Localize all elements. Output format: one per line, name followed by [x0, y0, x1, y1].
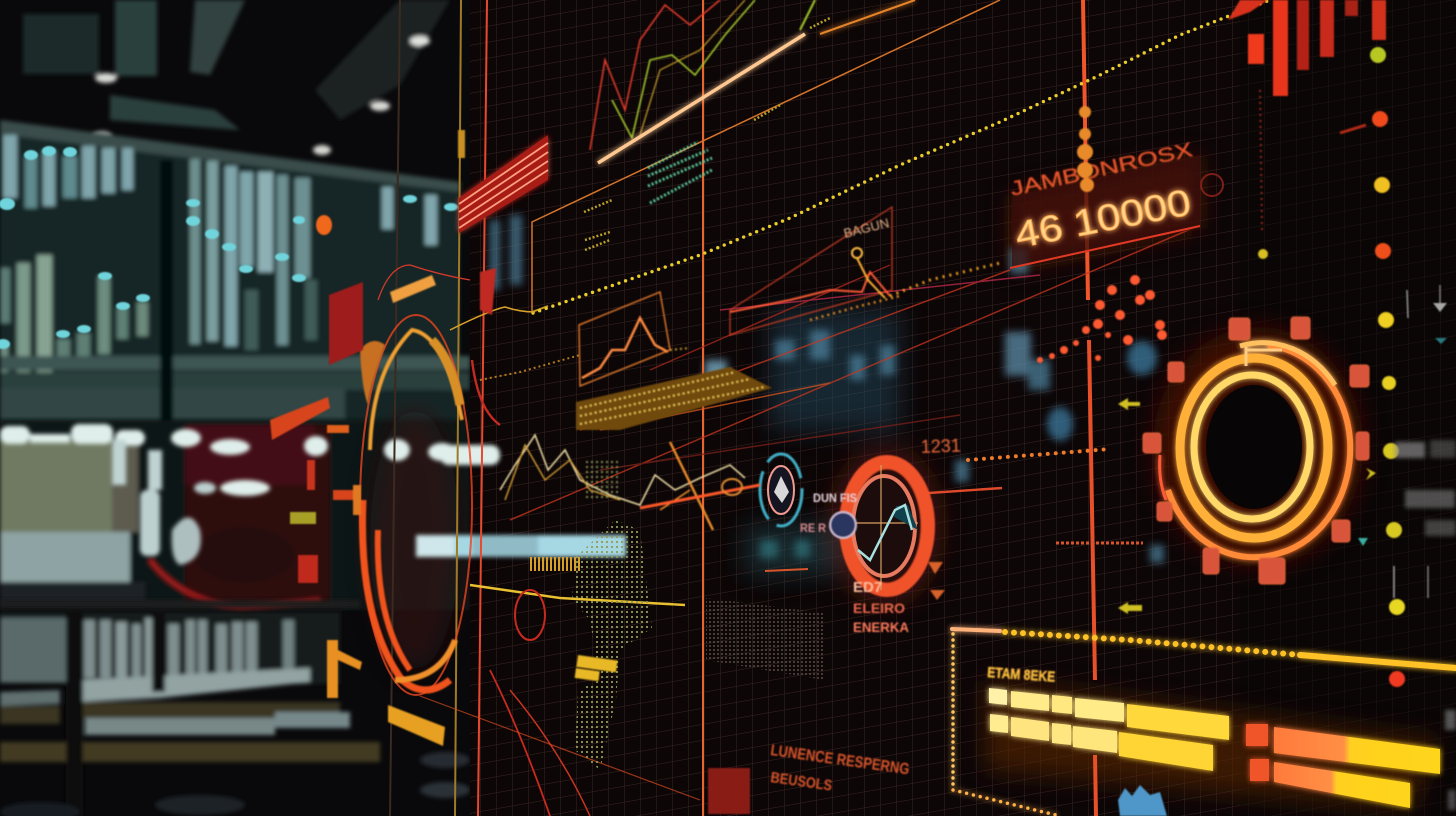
dark dotted panel lower center	[706, 598, 824, 814]
hero number display	[1008, 139, 1223, 268]
top-right vertical bars	[1228, 0, 1386, 96]
labels below dial	[853, 579, 909, 635]
main yellow dotted trend line	[533, 0, 1270, 313]
top line chart	[590, 0, 815, 150]
large orange-red ellipse gauge	[360, 265, 500, 695]
panel dotted frame	[952, 629, 1456, 816]
glowing arc of red dots	[1037, 275, 1167, 363]
row 1 yellow bars	[989, 688, 1229, 740]
bottom orange text: LUNENCE RESPERNG	[769, 742, 910, 778]
gold beads on vertical line	[1077, 106, 1094, 192]
hero number display: JAMBONROSX	[1008, 139, 1195, 201]
long red slanted lines	[510, 225, 1200, 520]
metric 1231 with dotted line	[920, 436, 1110, 460]
small framed line chart top center	[730, 207, 1000, 335]
blurred white-blue bar	[416, 535, 626, 557]
red square markers around the ring	[1143, 317, 1369, 584]
small code marks	[584, 18, 830, 250]
labels below dial: ELEIRO	[853, 600, 905, 616]
row 1 orange-yellow bar	[1246, 724, 1440, 774]
blue leaf icon	[1118, 785, 1167, 816]
orange dial with sine wave	[846, 462, 928, 590]
glowing orange slanted top line	[598, 0, 915, 163]
wave chart at center-left	[500, 435, 760, 530]
blurred trading floor with bars	[0, 120, 470, 600]
bottom orange text: BEUSOLS	[769, 769, 833, 795]
red striped panel	[459, 135, 548, 233]
hologram panel grid	[470, 0, 1456, 816]
white lights over the left gauge	[384, 439, 500, 465]
blurred white store lights	[0, 424, 328, 565]
small text cluster beside dial: DUN FIS	[813, 491, 857, 505]
short red dashes	[765, 488, 1143, 571]
blurred ceiling	[23, 0, 450, 155]
row 2 orange-yellow bar	[1250, 759, 1410, 808]
chart caption: BAGUN	[842, 215, 891, 241]
panel heading: ETAM 8EKE	[987, 664, 1056, 686]
blurred gray streaks right edge	[1395, 440, 1456, 810]
bottom orange text	[769, 742, 910, 795]
small text cluster beside dial: RE R	[800, 521, 826, 535]
metric 1231 with dotted line: 1231	[920, 436, 961, 457]
vertical red lines	[390, 0, 1096, 816]
teal ring icon	[760, 454, 802, 526]
labels below dial: ENERKA	[853, 619, 909, 635]
yellow dotted mesh shape	[576, 367, 772, 430]
wireframe data panel upper	[532, 0, 1000, 312]
orange left labels	[270, 130, 496, 746]
blurred teal light dots	[0, 146, 458, 689]
row 2 yellow bars	[990, 714, 1213, 771]
orange connector line	[450, 307, 580, 380]
lower-right framed bar panel	[952, 629, 1456, 816]
small arrows	[928, 398, 1376, 614]
hero number display: 46 10000	[1012, 182, 1194, 256]
small text cluster beside dial	[800, 491, 857, 538]
hazy blue data blobs behind grid	[490, 215, 1164, 563]
hazy glow halos	[370, 155, 1440, 810]
big glowing ring gauge	[1160, 343, 1350, 557]
small framed line chart left	[579, 292, 690, 386]
blurred railing with bars	[0, 600, 470, 816]
teal code text block	[648, 142, 712, 203]
right-column light dots	[1258, 47, 1447, 687]
blurred lower shop windows	[0, 420, 470, 610]
labels below dial: ED7	[853, 579, 882, 596]
yellow-green dotted map	[572, 520, 652, 770]
ring dark centre	[1206, 385, 1302, 509]
fine yellow and red map lines lower center	[420, 564, 700, 816]
